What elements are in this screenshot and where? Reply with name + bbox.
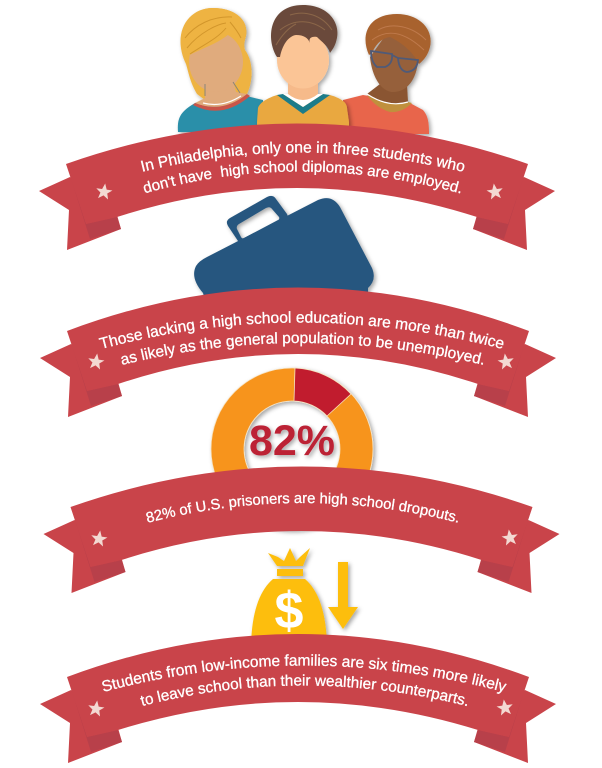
star xyxy=(87,699,105,717)
star xyxy=(497,352,515,370)
star xyxy=(95,182,113,200)
donut value: 82% xyxy=(249,417,335,465)
icon: donut chart 82% xyxy=(211,368,373,530)
ribbon 2: unemployment xyxy=(40,288,556,417)
icon: down arrow xyxy=(328,562,358,629)
star xyxy=(496,698,514,716)
ribbon text: as likely as the general population to be unemployed. xyxy=(121,332,484,365)
star xyxy=(90,529,108,547)
icon: money bag with down arrow: $ xyxy=(275,582,304,640)
ribbon text: Students from low-income families are six times more likely xyxy=(102,654,507,694)
icon: three students xyxy=(178,5,431,134)
star xyxy=(87,352,105,370)
ribbon text: don't have high school diplomas are employed. xyxy=(144,160,460,194)
star xyxy=(486,182,504,200)
icon: briefcase xyxy=(194,196,374,300)
ribbon text: 82% of U.S. prisoners are high school dropouts. xyxy=(146,492,458,523)
ribbon 4: low-income families xyxy=(40,634,556,763)
person: blonde student xyxy=(178,8,264,132)
ribbon text: Those lacking a high school education are more than twice xyxy=(98,311,504,348)
ribbon 3: prisoners xyxy=(44,466,560,593)
ribbon text: In Philadelphia, only one in three students who xyxy=(140,141,464,172)
star xyxy=(501,528,519,546)
person: coral shirt student with glasses xyxy=(343,14,431,134)
ribbon 1: employment in Philadelphia xyxy=(39,124,555,250)
icon: money bag with down arrow xyxy=(251,548,358,650)
ribbon text: to leave school than their wealthier counterparts. xyxy=(140,674,468,706)
person: brown haired student xyxy=(257,5,349,130)
icon: glasses xyxy=(371,51,418,72)
chart: orange ring xyxy=(211,368,373,530)
